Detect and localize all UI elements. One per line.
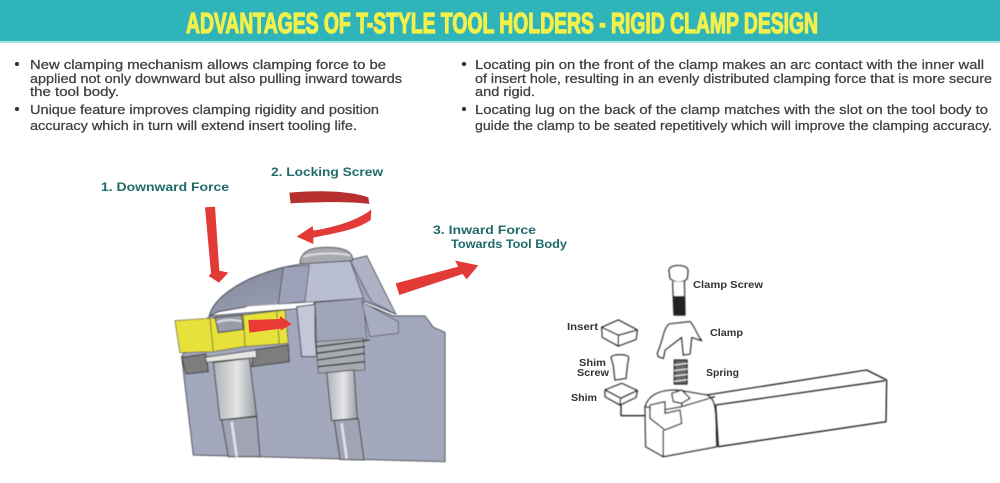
clamp [657, 322, 702, 358]
clamp [209, 256, 396, 316]
left bullet list: New clamping mechanism allows clamping force to be [30, 58, 386, 72]
part labels: Clamp [710, 328, 743, 339]
right bullet list: Locating pin on the front of the clamp makes an arc contact with the inner wall [475, 58, 984, 72]
arrow: locking screw rotation [289, 191, 371, 244]
pin screw [205, 350, 257, 362]
left bullet list: Unique feature improves clamping rigidity and position [30, 103, 379, 117]
spring [674, 360, 687, 384]
label: inward force: 3. Inward Force [433, 223, 536, 237]
yellow insert [175, 310, 288, 353]
part labels: Clamp Screw [693, 280, 763, 291]
part labels: Shim [571, 393, 597, 404]
part labels: Screw [577, 368, 609, 379]
locking screw head [300, 247, 353, 264]
holder body [645, 370, 887, 457]
inner clamp parts [247, 303, 313, 307]
tool body section [182, 303, 445, 462]
part labels: Spring [706, 368, 739, 379]
arrow: inward force on insert [248, 316, 292, 333]
shim screw [611, 355, 629, 380]
right bullet list: guide the clamp to be seated repetitively which will improve the clamping accuracy. [475, 119, 992, 133]
right bullet list: and rigid. [475, 85, 535, 99]
right bullet list: of insert hole, resulting in an evenly distributed clamping force that is more secure [475, 72, 992, 86]
shim [605, 383, 637, 405]
insert [602, 320, 637, 346]
right bullet list [462, 58, 992, 133]
arrow: inward force toward tool body [396, 261, 478, 295]
threaded screw [316, 338, 365, 373]
left bullet list: applied not only downward but also pulling inward towards [30, 72, 402, 86]
label: inward force [433, 223, 567, 251]
label: locking screw: 2. Locking Screw [271, 165, 384, 179]
shim [182, 354, 208, 374]
clamp screw [669, 265, 688, 315]
part labels: Insert [567, 322, 599, 333]
right bullet list: Locating lug on the back of the clamp matches with the slot on the tool body to [475, 103, 988, 117]
label: inward force: Towards Tool Body [451, 237, 567, 251]
exploded tool holder diagram [602, 265, 887, 457]
part labels [567, 280, 763, 404]
arrow: downward force [205, 207, 228, 283]
label: downward force: 1. Downward Force [101, 180, 229, 194]
cutaway diagram [175, 191, 478, 462]
left bullet list: accuracy which in turn will extend insert tooling life. [30, 119, 357, 133]
left bullet list [15, 58, 402, 133]
part labels: Shim [579, 358, 606, 369]
title banner [0, 0, 1000, 43]
left bullet list: the tool body. [30, 85, 119, 99]
